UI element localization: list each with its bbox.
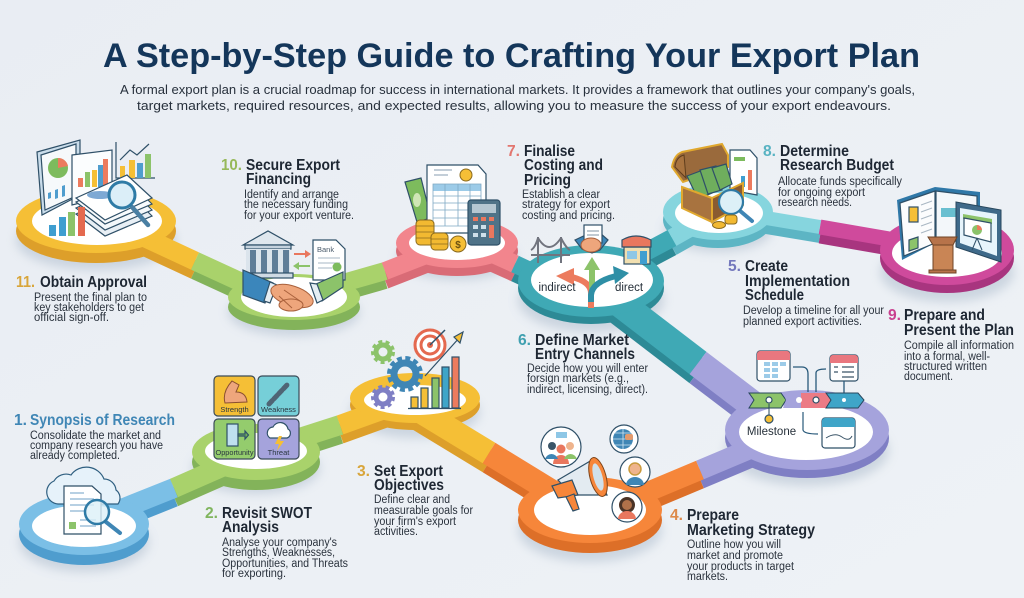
platform shadows and sides (16, 192, 1014, 572)
step 7 text: Pricing (524, 172, 571, 189)
icon: SWOT grid: Weakness (261, 405, 296, 414)
step 2 text: Opportunities, and Threats (222, 558, 348, 570)
icon: market entry channels (531, 225, 651, 308)
step 11 text (16, 274, 147, 324)
step 10 text: Secure Export (246, 157, 340, 174)
step 4 text: Prepare (687, 507, 739, 524)
step 9 text: into a formal, well- (904, 351, 990, 363)
icon: SWOT grid: Opportunity (216, 448, 254, 457)
step 10 text: Financing (246, 171, 311, 188)
step 11 text: key stakeholders to get (34, 302, 145, 314)
icon: plan document and presentation (897, 187, 1001, 273)
step 3 text: Define clear and (374, 494, 450, 506)
step 8 text: research needs. (778, 197, 852, 209)
step 9 text: document. (904, 371, 953, 383)
step 10 text: the necessary funding (244, 199, 348, 211)
step 2 text (205, 505, 348, 580)
step 11 text: Present the final plan to (34, 292, 147, 304)
step 5 text: Implementation (745, 273, 850, 290)
intro paragraph: target markets, required resources, and expected results, allowing you to measure the success of your export endeavours. (137, 98, 891, 113)
step 6 text: 6. (518, 332, 531, 349)
step 4 text: Marketing Strategy (687, 522, 815, 539)
step 4 text: markets. (687, 571, 728, 583)
step 9 text (888, 307, 1014, 383)
step 3 text: activities. (374, 526, 418, 538)
step 2 text: for exporting. (222, 568, 286, 580)
step 8 text: Research Budget (780, 157, 894, 174)
step 2 text: Analyse your company's (222, 537, 337, 549)
step 7 text (507, 143, 615, 222)
step 10 text (221, 157, 354, 222)
step 1 text: 1. (14, 412, 27, 429)
step 11 text: official sign-off. (34, 312, 109, 324)
step 7 text: Establish a clear (522, 189, 600, 201)
connector path (84, 210, 947, 533)
step 3 text: Set Export (374, 463, 443, 480)
step 1 text (14, 412, 175, 462)
step 7 text: strategy for export (522, 199, 611, 211)
step 8 text: Allocate funds specifically (778, 176, 902, 188)
step 8 text: for ongoing export (778, 187, 866, 199)
step 3 text: Objectives (374, 477, 444, 494)
step 9 text: Present the Plan (904, 322, 1014, 339)
step 10 text: Identify and arrange (244, 189, 339, 201)
intro paragraph: A formal export plan is a crucial roadmap for success in international markets. It provides a framework that outlines your company's goals, (120, 82, 915, 97)
step 6 text: Define Market (535, 332, 629, 349)
step 6 text: Entry Channels (535, 346, 635, 363)
step 1 text: company research you have (30, 440, 163, 452)
step 4 text: your products in target (687, 561, 795, 573)
step 9 text: Compile all information (904, 340, 1014, 352)
icon: reports and magnifier (37, 140, 155, 236)
step 1 text: Synopsis of Research (30, 412, 175, 429)
step 11 text: 11. (16, 274, 35, 291)
intro paragraph (120, 82, 915, 113)
step 7 text: costing and pricing. (522, 210, 615, 222)
step 5 text: Schedule (745, 287, 804, 304)
icon: SWOT grid: Threat (268, 448, 290, 457)
step 9 text: Prepare and (904, 307, 985, 324)
step 2 text: Analysis (222, 519, 279, 536)
step 4 text: 4. (670, 507, 683, 524)
step 9 text: 9. (888, 307, 901, 324)
step 7 text: 7. (507, 143, 520, 160)
step 10 text: 10. (221, 157, 242, 174)
icon: market entry channels: indirect (538, 282, 576, 294)
step 5 text (728, 258, 884, 328)
step 5 text: planned export activities. (743, 316, 862, 328)
step 6 text (518, 332, 648, 396)
icon: costing documents and calculator: $ (455, 240, 461, 251)
step 5 text: Create (745, 258, 788, 275)
step 1 text: Consolidate the market and (30, 430, 161, 442)
step 3 text: 3. (357, 463, 370, 480)
step 4 text (670, 507, 815, 583)
title: A Step-by-Step Guide to Crafting Your Export Plan (103, 37, 920, 75)
icon: costing documents and calculator (405, 165, 500, 252)
step 7 text: Finalise (524, 143, 575, 160)
step 3 text: measurable goals for (374, 505, 473, 517)
icon: implementation timeline: Milestone (747, 426, 796, 438)
step 5 text: Develop a timeline for all your (743, 305, 884, 317)
step 7 text: Costing and (524, 157, 603, 174)
step 6 text: indirect, licensing, direct). (527, 384, 648, 396)
step 2 text: Revisit SWOT (222, 505, 312, 522)
step 3 text: your firm's export (374, 516, 457, 528)
step 6 text: Decide how you will enter (527, 363, 648, 375)
step 5 text: 5. (728, 258, 741, 275)
step 6 text: forsign markets (e.g., (527, 373, 629, 385)
step 8 text (763, 143, 902, 209)
icon: SWOT grid: Strength (220, 405, 249, 414)
step 2 text: Strengths, Weaknesses, (222, 547, 335, 559)
platform tops (16, 184, 1014, 555)
step 9 text: structured written (904, 361, 987, 373)
icon: treasure chest (672, 144, 757, 228)
icon: bank and handshake (243, 231, 345, 312)
step 4 text: market and promote (687, 550, 783, 562)
step 8 text: 8. (763, 143, 776, 160)
icon: cloud document and magnifier (47, 467, 120, 534)
step 4 text: Outline how you will (687, 539, 781, 551)
step 1 text: already completed. (30, 450, 120, 462)
icon: SWOT grid (214, 376, 299, 459)
icon: megaphone and audience (541, 425, 650, 522)
step 8 text: Determine (780, 143, 849, 160)
step 3 text (357, 463, 473, 538)
step 2 text: 2. (205, 505, 218, 522)
step 11 text: Obtain Approval (40, 274, 147, 291)
icon: bank and handshake: Bank (317, 245, 334, 254)
icon: implementation timeline (747, 351, 864, 448)
step 10 text: for your export venture. (244, 210, 354, 222)
icon: gears, target and growth bars (372, 330, 463, 408)
icon: market entry channels: direct (615, 282, 644, 294)
